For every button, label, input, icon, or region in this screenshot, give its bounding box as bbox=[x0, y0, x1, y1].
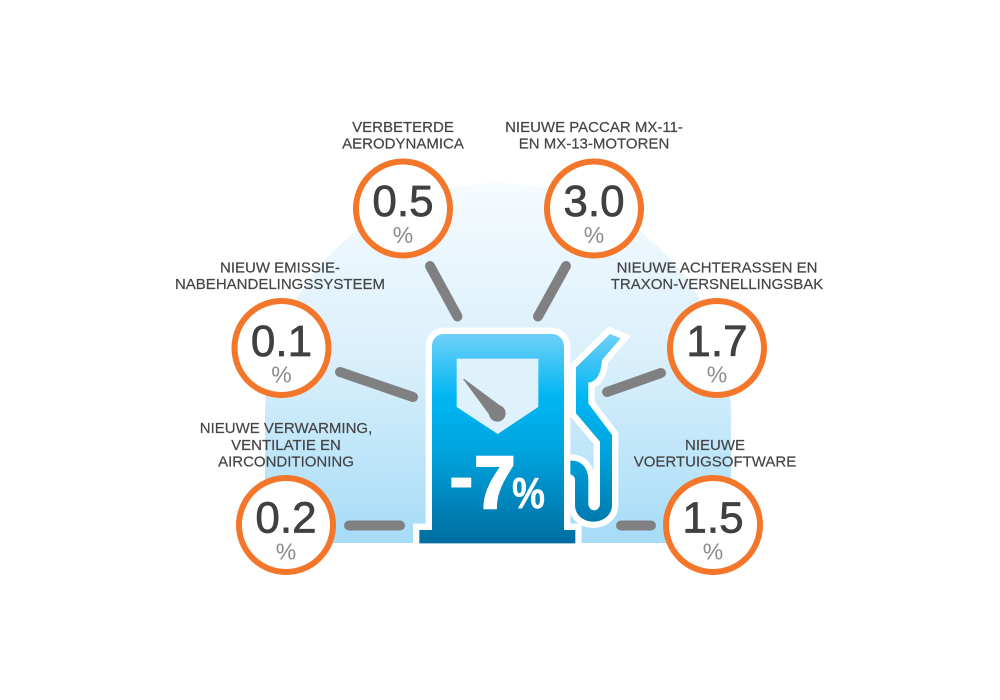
badge 0.5 %: % bbox=[393, 222, 413, 248]
badge 0.5 % bbox=[356, 162, 450, 256]
connector bbox=[340, 372, 413, 397]
label: NIEUW EMISSIE- bbox=[220, 260, 340, 276]
background dome bbox=[265, 183, 731, 543]
label: NIEUWE ACHTERASSEN EN bbox=[617, 260, 817, 276]
pump body bbox=[419, 334, 575, 543]
badge 1.5 % bbox=[666, 478, 760, 572]
badge 1.7 %: % bbox=[707, 362, 727, 388]
gauge window bbox=[457, 359, 538, 434]
label: VENTILATIE EN bbox=[231, 437, 341, 454]
badge 3.0 %: % bbox=[584, 222, 604, 248]
label: NIEUWE bbox=[685, 437, 745, 454]
connector bbox=[349, 520, 400, 530]
item: nieuw emissie-nabehandelingssysteem bbox=[175, 260, 413, 397]
badge 0.1 %: % bbox=[271, 362, 292, 388]
badge 1.7 %: 1.7 bbox=[686, 317, 748, 366]
item: nieuwe achterassen en traxon bbox=[607, 260, 823, 395]
connector bbox=[621, 520, 651, 530]
badge 1.5 %: 1.5 bbox=[682, 494, 744, 542]
label: NIEUWE VERWARMING, bbox=[200, 420, 372, 437]
connector bbox=[538, 266, 566, 316]
badge 0.2 %: 0.2 bbox=[255, 494, 317, 542]
pump label: -7%: % bbox=[512, 469, 545, 518]
label: AIRCONDITIONING bbox=[218, 454, 354, 470]
label: NABEHANDELINGSSYSTEEM bbox=[175, 276, 385, 293]
badge 1.5 %: % bbox=[703, 538, 723, 564]
label: AERODYNAMICA bbox=[342, 136, 464, 152]
label: NIEUWE PACCAR MX-11- bbox=[505, 119, 683, 136]
label: VOERTUIGSOFTWARE bbox=[634, 454, 796, 470]
label: VERBETERDE bbox=[352, 119, 454, 136]
item: verbeterde aerodynamica bbox=[342, 119, 464, 316]
item: nieuwe paccar motoren bbox=[505, 119, 683, 316]
pump hose and nozzle bbox=[564, 334, 621, 522]
fuel pump bbox=[419, 334, 621, 543]
pump label: -7%: 7 bbox=[474, 442, 515, 524]
badge 3.0 % bbox=[547, 162, 641, 256]
connector bbox=[430, 266, 458, 316]
label: EN MX-13-MOTOREN bbox=[519, 136, 669, 152]
badge 0.1 % bbox=[234, 301, 328, 395]
badge 0.2 %: % bbox=[276, 538, 296, 564]
badge 0.5 %: 0.5 bbox=[372, 177, 434, 226]
pump label: -7%: - bbox=[449, 435, 474, 518]
gauge needle bbox=[463, 379, 506, 422]
connector bbox=[607, 373, 661, 392]
pump label: -7% bbox=[449, 435, 545, 524]
item: verwarming ventilatie airconditioning bbox=[200, 420, 400, 572]
badge 1.7 % bbox=[670, 301, 764, 395]
label: TRAXON-VERSNELLINGSBAK bbox=[611, 276, 823, 293]
item: nieuwe voertuigsoftware bbox=[621, 437, 796, 572]
badge 0.2 % bbox=[239, 478, 333, 572]
badge 0.1 %: 0.1 bbox=[251, 317, 312, 366]
badge 3.0 %: 3.0 bbox=[563, 177, 625, 226]
